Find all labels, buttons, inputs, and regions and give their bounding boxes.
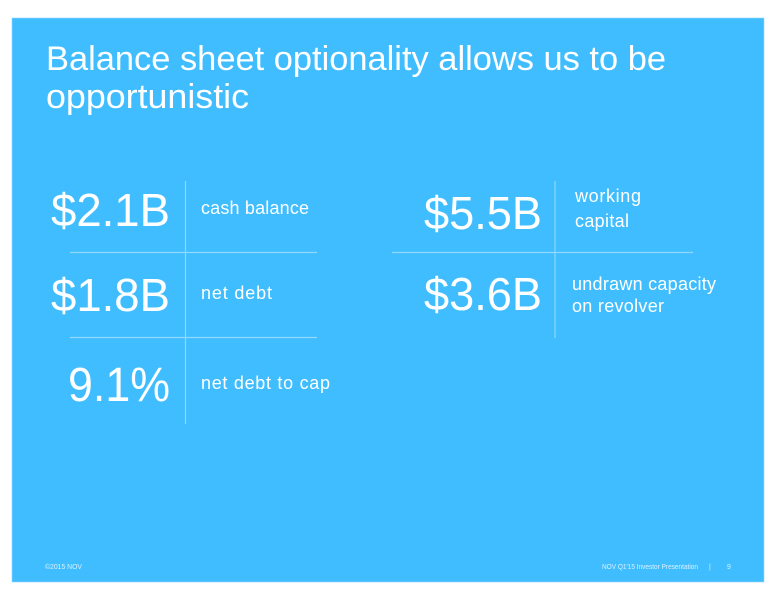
title [46, 40, 666, 116]
metric: working capital [424, 186, 641, 239]
metric: net debt to cap [68, 359, 330, 412]
metric: working capital: capital [575, 211, 629, 231]
metric: net debt: $1.8B [51, 269, 170, 321]
footer: presentation name and page number: 9 [727, 564, 731, 571]
panel: left metrics [51, 181, 330, 424]
footer: presentation name and page number: NOV Q1'15 Investor Presentation [602, 564, 698, 571]
metric: undrawn capacity on revolver: on revolver [572, 296, 664, 316]
metric: cash balance: $2.1B [51, 184, 170, 236]
metric: net debt to cap: net debt to cap [201, 373, 330, 393]
panel: right metrics [392, 181, 716, 338]
metric: working capital: $5.5B [424, 187, 542, 239]
metric: net debt: net debt [201, 283, 272, 303]
metric: net debt to cap: 9.1% [68, 359, 170, 412]
footer: copyright: ©2015 NOV [45, 563, 82, 571]
metric: net debt [51, 269, 272, 321]
metric: working capital: working [574, 186, 641, 206]
metric: cash balance: cash balance [201, 198, 309, 218]
metric: cash balance [51, 184, 309, 236]
metric: undrawn capacity on revolver [424, 268, 716, 320]
footer: presentation name and page number: | [709, 564, 711, 571]
title: opportunistic [46, 78, 249, 116]
metric: undrawn capacity on revolver: $3.6B [424, 268, 542, 320]
metric: undrawn capacity on revolver: undrawn capacity [572, 274, 716, 294]
title: Balance sheet optionality allows us to be [46, 40, 666, 78]
